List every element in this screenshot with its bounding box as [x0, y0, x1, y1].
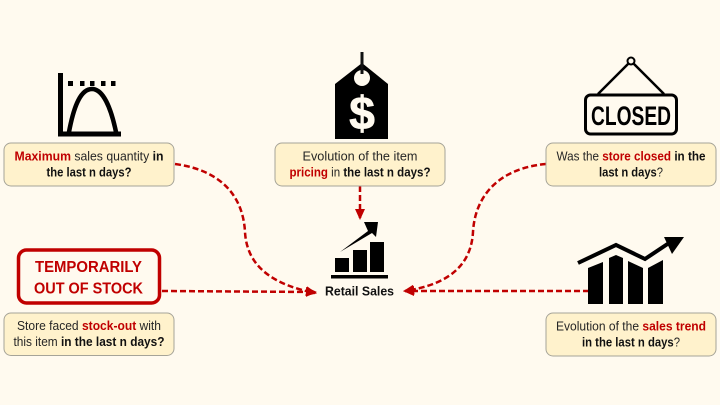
arrow: maximum sales to retail sales — [175, 164, 315, 293]
panel: sales trend question: Evolution of the sales trend — [556, 318, 706, 334]
panel: store closed question — [546, 143, 716, 186]
panel: stock-out question — [4, 313, 174, 356]
panel: sales trend question: in the last n days? — [582, 334, 680, 350]
panel: pricing question: Evolution of the item — [302, 148, 418, 164]
panel: maximum sales question: the last n days? — [46, 164, 132, 180]
icon: sales trend chart — [578, 237, 684, 304]
arrow: sales trend to retail sales — [405, 290, 589, 292]
panel: store closed question: last n days? — [599, 164, 663, 180]
arrow: pricing to retail sales — [359, 186, 361, 218]
panel: stock-out question: this item in the last n days? — [14, 334, 165, 349]
icon: price tag — [335, 52, 388, 139]
panel: maximum sales question — [4, 143, 174, 186]
panel: pricing question: pricing in the last n days? — [290, 164, 431, 180]
panel: store closed question: Was the store closed in the — [556, 148, 706, 164]
icon: closed sign: CLOSED — [591, 101, 671, 131]
label: retail sales: Retail Sales — [325, 284, 394, 298]
callout: temporarily out of stock — [18, 250, 160, 303]
icon: closed sign — [586, 58, 676, 134]
panel: maximum sales question: Maximum sales quantity in — [14, 148, 164, 164]
callout: temporarily out of stock: OUT OF STOCK — [34, 280, 143, 298]
panel: pricing question — [275, 143, 445, 186]
icon: retail sales growth chart — [331, 222, 388, 278]
arrow: stock-out to retail sales — [162, 291, 315, 292]
panel: stock-out question: Store faced stock-out with — [17, 318, 161, 333]
icon: maximum curve chart — [60, 73, 121, 134]
panel: sales trend question — [546, 313, 716, 356]
arrow: store closed to retail sales — [405, 164, 546, 291]
callout: temporarily out of stock: TEMPORARILY — [35, 259, 142, 276]
icon: price tag: $ — [349, 87, 375, 139]
